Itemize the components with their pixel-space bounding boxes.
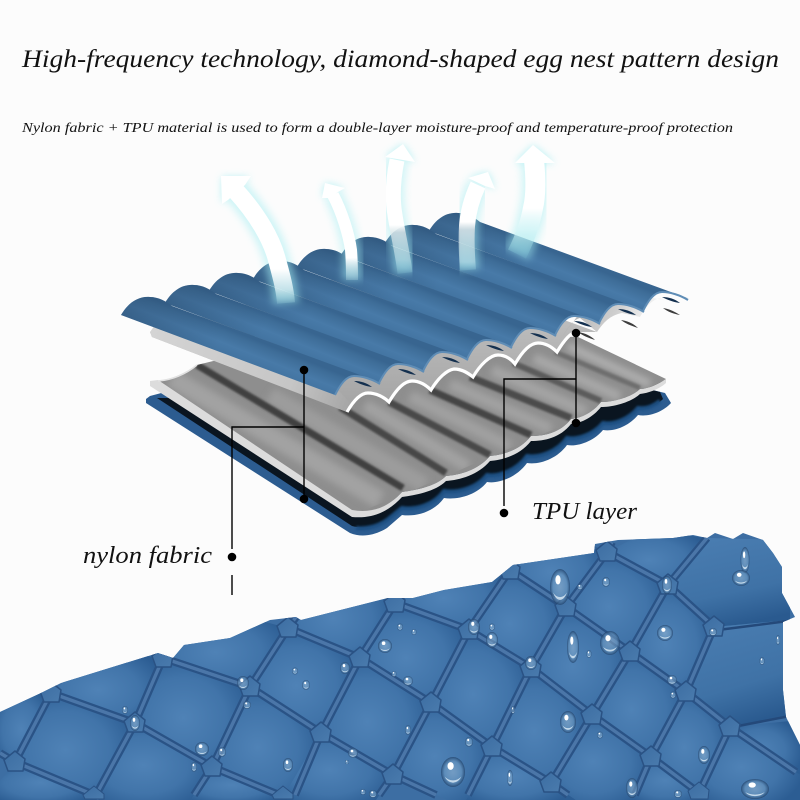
arrow 3 <box>385 144 415 273</box>
arrow 2 <box>322 183 352 280</box>
grey rib highlights and dark stripes <box>172 346 650 500</box>
arrow 4 <box>467 172 495 270</box>
subtitle: Nylon fabric + TPU material is used to form a double-layer moisture-proof and temperature-proof protection <box>21 121 733 136</box>
callout dots: nylon fabric <box>228 366 308 561</box>
mat large right cells <box>678 538 790 724</box>
label: TPU layer: TPU layer <box>532 499 638 525</box>
middle layer: grey TPU <box>150 330 666 517</box>
inflatable mat with droplets <box>0 530 800 800</box>
callout dots: TPU layer <box>500 329 580 517</box>
bottom layer: blue nylon fabric <box>146 325 671 535</box>
mat diamond cells <box>0 530 800 800</box>
top layer: blue nylon ribs <box>121 213 690 395</box>
leader lines: TPU layer <box>504 333 576 506</box>
mat fold creases <box>718 621 790 727</box>
title: High-frequency technology, diamond-shaped egg nest pattern design <box>21 46 779 73</box>
white edge band <box>150 379 666 517</box>
label: nylon fabric: nylon fabric <box>83 543 212 569</box>
dark crescents at right end <box>578 332 595 340</box>
leader lines: nylon fabric <box>232 370 304 595</box>
mat channel highlights <box>0 538 796 795</box>
water droplets <box>122 547 780 799</box>
arrow 5 <box>515 145 555 254</box>
layered fabric diagram <box>121 213 690 535</box>
arrow 1 <box>221 176 286 303</box>
mat base <box>0 530 800 800</box>
arrows: vapour rising <box>221 144 555 303</box>
white wave edge <box>347 332 576 412</box>
mat knots <box>4 541 740 799</box>
mat channels <box>0 538 796 795</box>
top layer: underside sheet with white wave edge <box>150 260 680 412</box>
